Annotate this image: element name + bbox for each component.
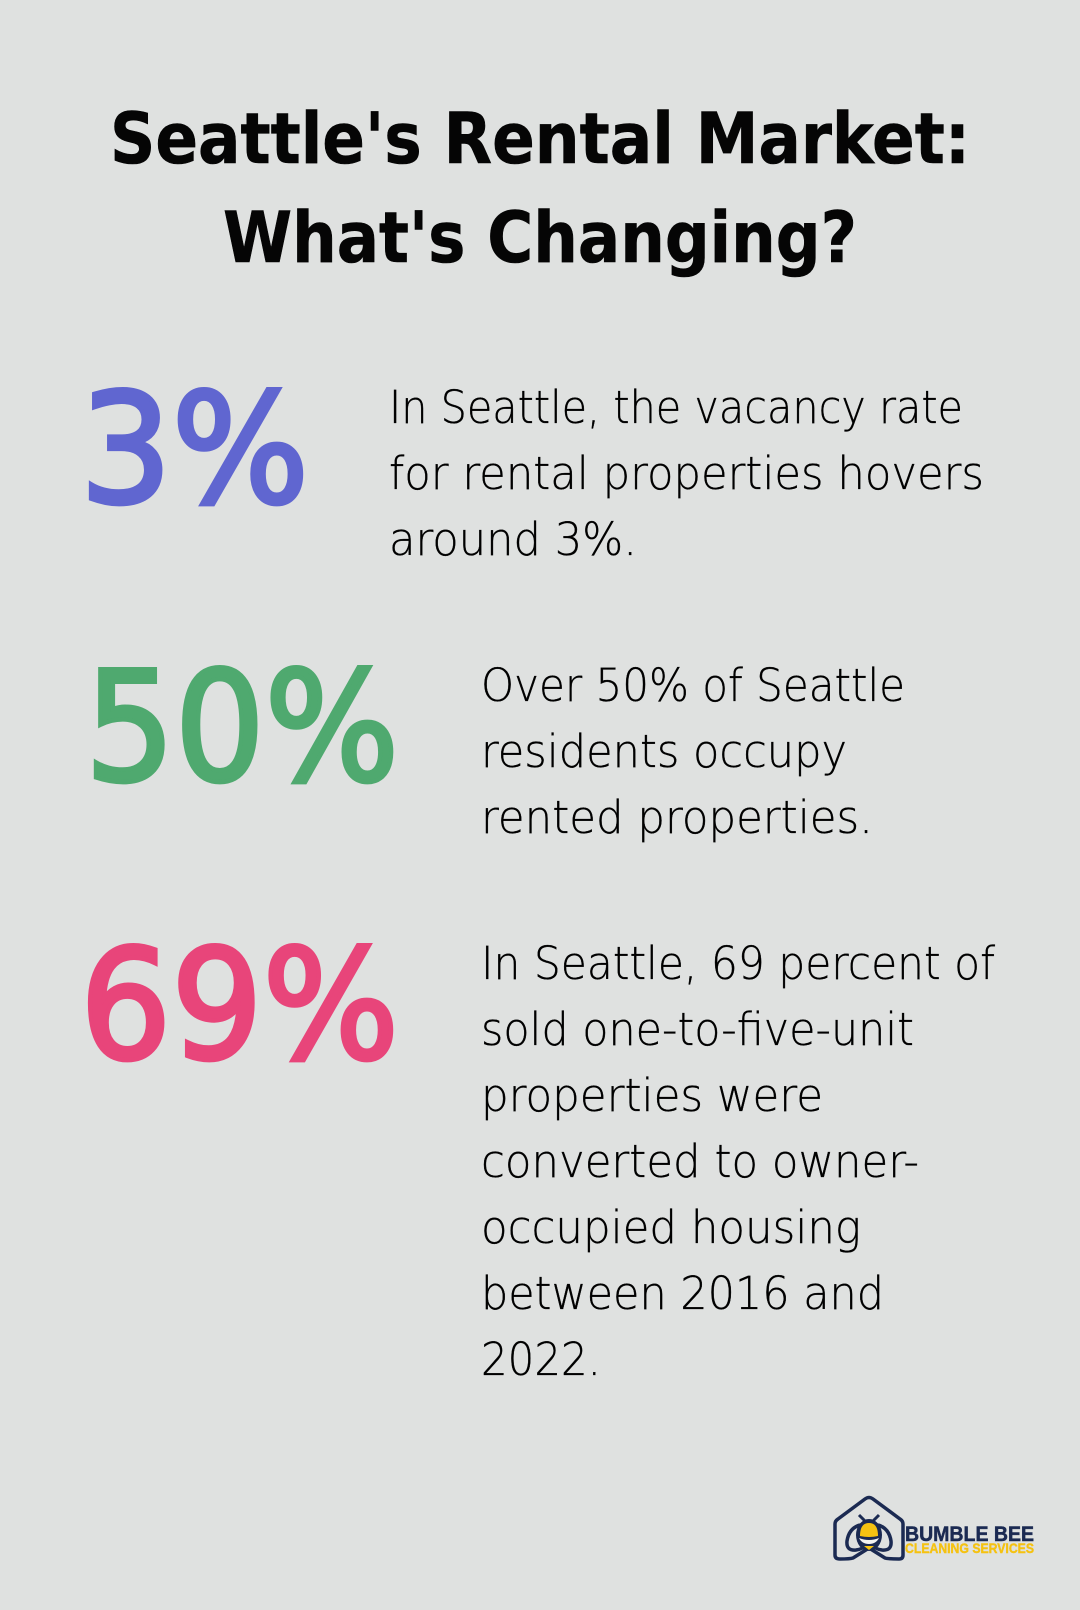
title: What's Changing? (223, 197, 857, 279)
panel: vacancy rate (80, 361, 984, 566)
text: vacancy rate description: around 3%. (389, 513, 637, 566)
title: Seattle's Rental Market: (110, 98, 970, 180)
text: conversions description: 2022. (481, 1333, 601, 1386)
text: conversions description: In Seattle, 69 percent of (481, 937, 995, 990)
text: renter residents description (481, 659, 905, 844)
icon: bee in house (835, 1498, 903, 1559)
wordmark: Cleaning Services: CLEANING SERVICES (905, 1541, 1034, 1556)
text: vacancy rate description: for rental properties hovers (389, 447, 984, 500)
logo: Bumble Bee Cleaning Services (835, 1498, 1034, 1559)
text: conversions description: between 2016 and (481, 1267, 884, 1320)
title (110, 98, 970, 279)
stat: 69%: 69% (80, 917, 399, 1094)
text: vacancy rate description: In Seattle, the vacancy rate (389, 381, 963, 434)
text: conversions description: converted to owner- (481, 1135, 919, 1188)
text: renter residents description: Over 50% of Seattle (481, 659, 905, 712)
stat: 3%: 3% (80, 361, 309, 538)
panel: renter residents (85, 639, 905, 844)
text: conversions description: properties were (481, 1069, 823, 1122)
text: conversions description (481, 937, 995, 1386)
text: renter residents description: residents occupy (481, 725, 847, 778)
stat: 50%: 50% (85, 639, 399, 816)
text: conversions description: occupied housing (481, 1201, 861, 1254)
wordmark: Bumble Bee: BUMBLE BEE (905, 1523, 1034, 1546)
text: vacancy rate description (389, 381, 984, 566)
panel: owner-occupied conversions (80, 917, 995, 1386)
text: conversions description: sold one-to-five-unit (481, 1003, 914, 1056)
text: renter residents description: rented properties. (481, 791, 873, 844)
